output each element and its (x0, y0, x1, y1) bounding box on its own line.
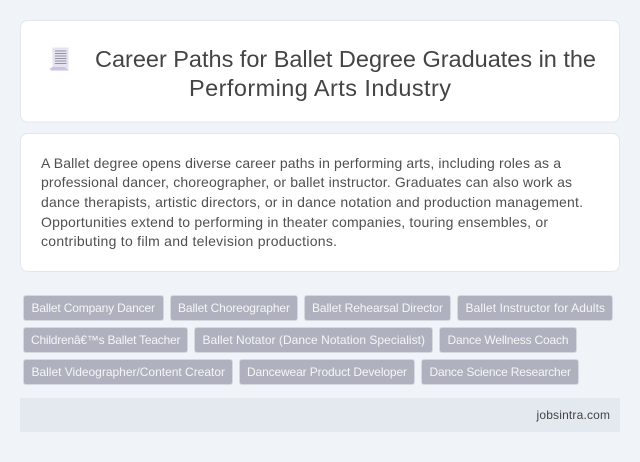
icon: paper scroll (50, 48, 68, 70)
tag (304, 296, 450, 320)
description text: professional dancer, choreographer, or ballet instructor. Graduates can also work as (41, 174, 572, 190)
tag: Dancewear Product Developer (247, 365, 407, 379)
tag (24, 328, 188, 352)
description text: dance therapists, artistic directors, or in dance notation and production management. (41, 194, 583, 210)
tag (458, 296, 612, 320)
tag (24, 296, 164, 320)
tag: Ballet Notator (Dance Notation Specialist) (202, 333, 425, 347)
tag (240, 360, 414, 384)
panel: title header (20, 20, 620, 122)
tag (24, 360, 232, 384)
footer source text: jobsintra.com (536, 408, 610, 422)
tag: Dance Wellness Coach (448, 333, 568, 347)
tag (440, 328, 576, 352)
tag: Ballet Videographer/Content Creator (32, 365, 225, 379)
description text: contributing to film and television productions. (41, 233, 337, 249)
description text: Opportunities extend to performing in theater companies, touring ensembles, or (41, 214, 548, 230)
tag: Childrenâ€™s Ballet Teacher (31, 333, 180, 347)
title: Career Paths for Ballet Degree Graduates in the (95, 46, 596, 72)
title (95, 46, 596, 101)
tag: Ballet Choreographer (178, 301, 290, 315)
tag: Dance Science Researcher (430, 365, 571, 379)
tag: Ballet Company Dancer (32, 301, 155, 315)
description text: A Ballet degree opens diverse career paths in performing arts, including roles as a (41, 155, 561, 171)
panel: description (20, 134, 620, 272)
tag (194, 328, 432, 352)
description text (41, 155, 583, 249)
tag (170, 296, 298, 320)
tag (422, 360, 578, 384)
title: Performing Arts Industry (189, 75, 451, 101)
footer bar (20, 398, 620, 432)
tag: Ballet Rehearsal Director (312, 301, 443, 315)
career tags (24, 296, 612, 384)
tag: Ballet Instructor for Adults (466, 301, 605, 315)
